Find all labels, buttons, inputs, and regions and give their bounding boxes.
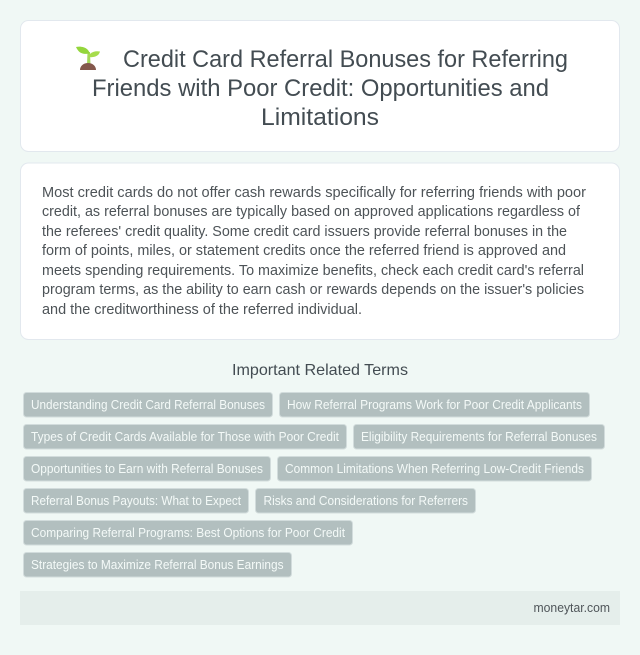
heading: related terms: Important Related Terms bbox=[232, 362, 408, 379]
title: Limitations bbox=[261, 104, 379, 131]
text block: summary: meets spending requirements. To maximize benefits, check each credit card's referral bbox=[42, 263, 584, 279]
text block: summary: and the creditworthiness of the referred individual. bbox=[42, 302, 362, 318]
footer source text: moneytar.com bbox=[534, 600, 610, 615]
tag list bbox=[24, 392, 604, 577]
tag: Eligibility Requirements for Referral Bonuses bbox=[361, 429, 597, 444]
tag: How Referral Programs Work for Poor Credit Applicants bbox=[287, 397, 582, 412]
icon: seedling bbox=[76, 47, 100, 70]
tag bbox=[24, 424, 346, 449]
title bbox=[92, 46, 568, 131]
tag bbox=[24, 392, 272, 417]
tag bbox=[278, 456, 592, 481]
tag bbox=[24, 552, 292, 577]
tag bbox=[256, 488, 476, 513]
tag: Opportunities to Earn with Referral Bonuses bbox=[31, 461, 263, 476]
footer bbox=[20, 591, 620, 625]
text block: summary bbox=[42, 185, 586, 318]
tag bbox=[280, 392, 590, 417]
panel: summary bbox=[20, 163, 620, 340]
tag bbox=[24, 520, 352, 545]
tag: Risks and Considerations for Referrers bbox=[264, 493, 468, 508]
text block: summary: Most credit cards do not offer cash rewards specifically for referring friends with poor bbox=[42, 185, 586, 201]
tag: Strategies to Maximize Referral Bonus Earnings bbox=[31, 557, 284, 572]
text block: summary: credit, as referral bonuses are typically based on approved applications regardless of bbox=[42, 204, 581, 220]
tag: Comparing Referral Programs: Best Options for Poor Credit bbox=[31, 525, 345, 540]
tag: Understanding Credit Card Referral Bonuses bbox=[31, 397, 265, 412]
text block: summary: program terms, as the ability to earn cash or rewards depends on the issuer's policies bbox=[42, 282, 584, 298]
tag bbox=[24, 488, 248, 513]
tag: Referral Bonus Payouts: What to Expect bbox=[31, 493, 241, 508]
tag: Types of Credit Cards Available for Those with Poor Credit bbox=[31, 429, 339, 444]
text block: summary: form of points, miles, or statement credits once the referred friend is approved and bbox=[42, 243, 566, 259]
tag bbox=[354, 424, 604, 449]
tag: Common Limitations When Referring Low-Credit Friends bbox=[285, 461, 584, 476]
tag bbox=[24, 456, 270, 481]
title: Credit Card Referral Bonuses for Referring bbox=[123, 46, 568, 73]
text block: summary: the referees' credit quality. Some credit card issuers provide referral bonuses in the bbox=[42, 224, 567, 240]
title: Friends with Poor Credit: Opportunities and bbox=[92, 75, 549, 102]
panel: title bbox=[20, 20, 620, 152]
